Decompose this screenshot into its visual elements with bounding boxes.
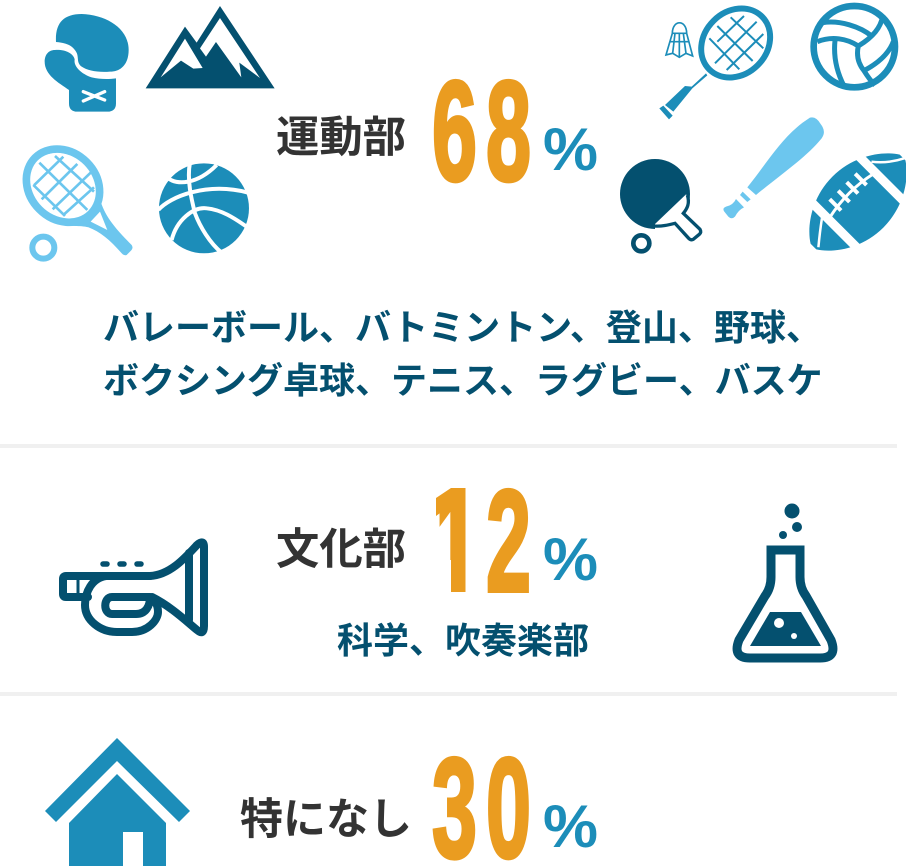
- icon: volleyball: [814, 6, 895, 87]
- icon: american football: [784, 127, 906, 276]
- number: 30: [432, 729, 531, 866]
- percent sign: %: [543, 526, 598, 593]
- icon: boxing glove: [45, 14, 129, 112]
- number: 12: 2: [486, 460, 531, 622]
- number: 12: 1: [436, 460, 472, 622]
- sports list text: ボクシング卓球、テニス、ラグビー、バスケ: [103, 360, 823, 401]
- icon: house: [45, 738, 190, 866]
- icon: basketball: [158, 163, 249, 253]
- icon: flask: [737, 504, 833, 658]
- club list text: 科学、吹奏楽部: [337, 620, 589, 661]
- sports list text: バレーボール、バトミントン、登山、野球、: [103, 307, 822, 348]
- icon: shuttlecock: [666, 23, 693, 57]
- icon: mountains: [146, 6, 275, 88]
- percent sign: %: [543, 793, 598, 860]
- number: 12: [425, 460, 531, 622]
- number: 68: 8: [486, 52, 531, 211]
- number: 68: [432, 52, 531, 211]
- icon: ping pong paddle and ball: [620, 159, 703, 251]
- percent sign: %: [543, 116, 598, 183]
- sports list text: [103, 307, 823, 401]
- heading: 文化部: 文化部: [276, 526, 406, 574]
- icon: tennis racket and ball: [12, 134, 133, 259]
- number: 68: 6: [432, 52, 477, 211]
- icon: badminton racket: [659, 0, 784, 119]
- heading: 特になし: 特になし: [240, 796, 412, 844]
- heading: 運動部: 運動部: [276, 114, 406, 162]
- icon: trumpet: [63, 542, 204, 632]
- icon: baseball bat: [723, 117, 824, 218]
